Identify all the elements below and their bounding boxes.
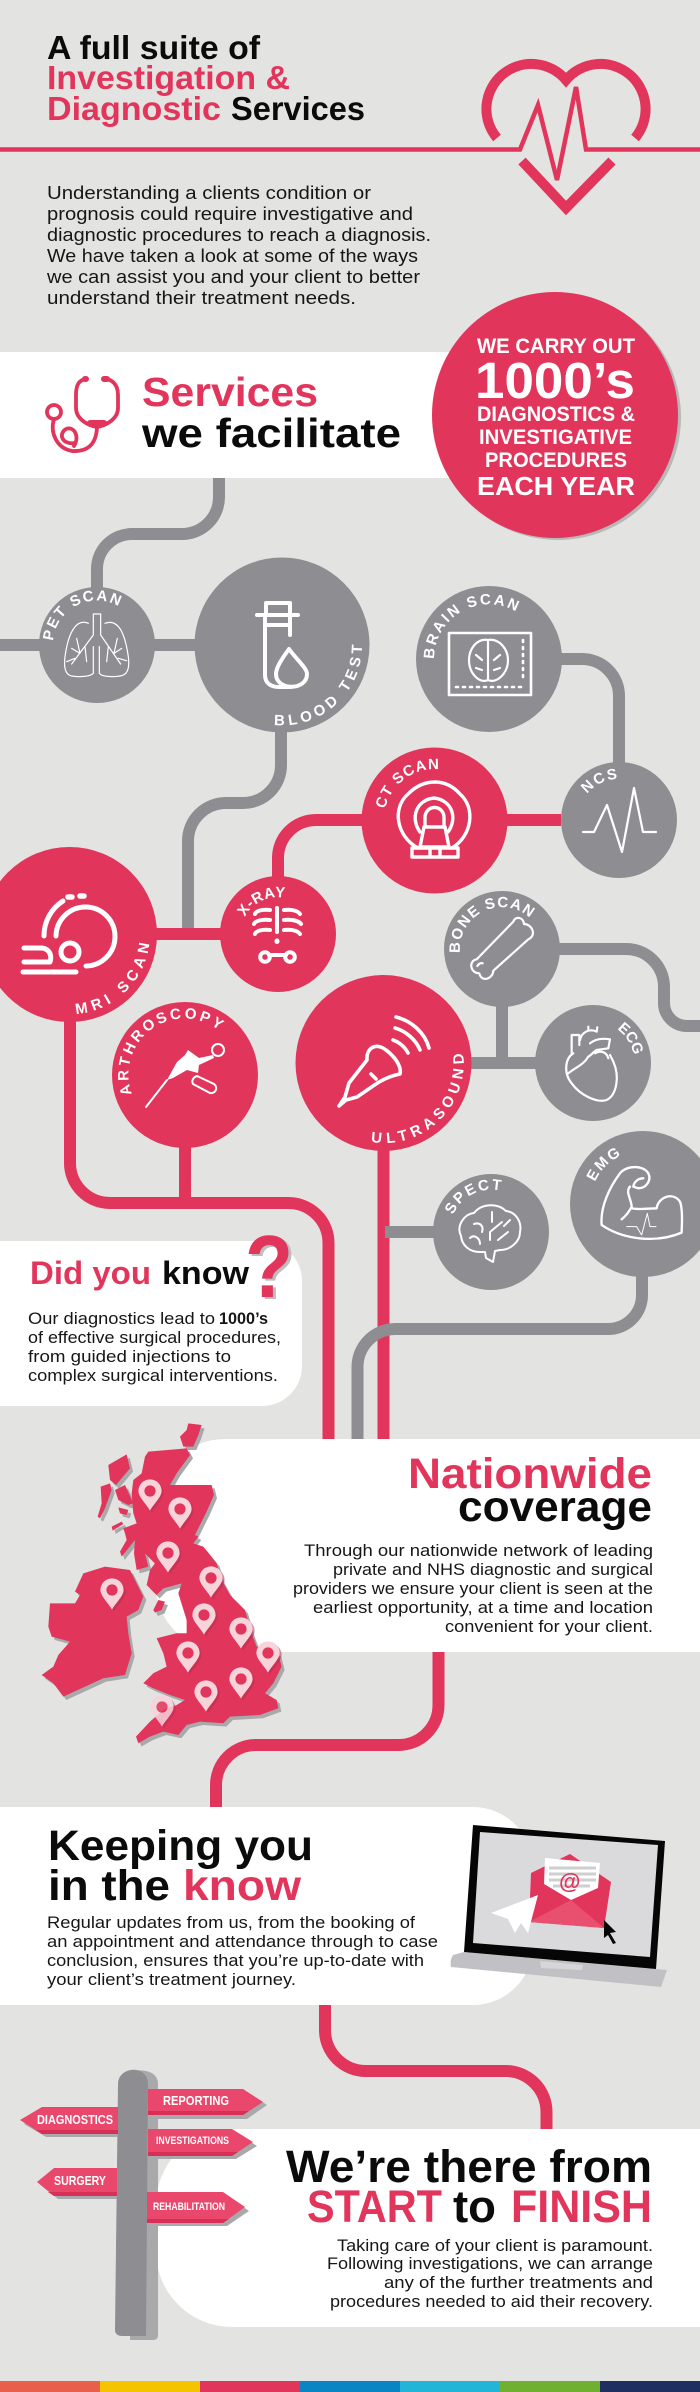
heading: services we facilitate (141, 369, 401, 456)
footer colour stripe (0, 2381, 700, 2392)
icon: ribcage (254, 908, 301, 962)
node: ECG: ECG (618, 1022, 643, 1054)
intro paragraph: We have taken a look at some of the ways (47, 246, 418, 266)
node: SPECT: SPECT (445, 1179, 502, 1214)
title: Investigation & (47, 59, 290, 96)
node: EMG: EMG (586, 1148, 620, 1181)
text: keeping you copy: Regular updates from us, from the booking of (47, 1913, 415, 1932)
connector line: keeping to finish (325, 2003, 547, 2130)
panel: services we facilitate band (0, 352, 470, 478)
node: ultrasound: ULTRASOUND (372, 1054, 464, 1143)
node: ultrasound (296, 975, 472, 1151)
node: arthroscopy (112, 1002, 258, 1148)
node: EMG (570, 1131, 700, 1277)
sign: investigations: INVESTIGATIONS (156, 2135, 229, 2147)
callout: 1000's each year: PROCEDURES (485, 449, 627, 472)
callout: 1000's each year: WE CARRY OUT (477, 335, 635, 358)
panel: did you know (0, 1217, 302, 1406)
node: X-ray (220, 876, 336, 992)
node: blood test: BLOOD TEST (274, 644, 362, 726)
text: nationwide copy: Through our nationwide network of leading (304, 1541, 653, 1560)
panel: nationwide coverage (155, 1439, 700, 1652)
sign: diagnostics (20, 2107, 118, 2137)
heading: keeping you in the know: in the (48, 1862, 170, 1910)
title: Diagnostic (47, 90, 221, 127)
sign: reporting: REPORTING (163, 2093, 229, 2108)
heading: did you know: know (162, 1255, 249, 1291)
callout: 1000's each year (432, 292, 681, 540)
intro paragraph: understand their treatment needs. (47, 288, 356, 308)
node: brain scan: BRAIN SCAN (424, 594, 520, 658)
node: CT scan (362, 748, 508, 894)
text: start to finish copy (327, 2236, 653, 2311)
icon: lungs (65, 614, 129, 677)
node: bone scan (444, 891, 560, 1007)
heading: we're there from start to finish: We’re there from (286, 2141, 652, 2192)
node: arthroscopy: ARTHROSCOPY (118, 1008, 224, 1094)
node: X-ray: X-RAY (236, 886, 286, 917)
panel: keeping you in the know (0, 1807, 533, 2005)
icon: flexed arm (601, 1167, 682, 1239)
node: PET scan (39, 587, 155, 703)
sign: reporting (148, 2089, 267, 2119)
text: start to finish copy: Taking care of your client is paramount. (337, 2236, 653, 2255)
node: PET scan: PET SCAN (42, 590, 122, 640)
title: Services (231, 90, 365, 127)
text: keeping you copy (47, 1913, 438, 1989)
node: MRI scan: MRI SCAN (75, 942, 150, 1014)
icon: CT scanner (398, 782, 470, 857)
heading: we're there from start to finish: to (453, 2181, 496, 2232)
heading: nationwide coverage: coverage (458, 1483, 652, 1531)
icon: test tube and drop (257, 603, 307, 687)
heading: did you know (30, 1255, 249, 1291)
callout: 1000's each year: EACH YEAR (477, 471, 635, 501)
icon: ultrasound probe (339, 1017, 429, 1106)
icon: stethoscope (47, 379, 118, 451)
heading: we're there from start to finish (286, 2141, 652, 2232)
icon: heart (566, 1027, 617, 1101)
text: keeping you copy: an appointment and attendance through to case (47, 1932, 438, 1951)
text: did you know copy: Our diagnostics lead to (28, 1309, 215, 1328)
icon: question mark: ? (248, 1219, 296, 1318)
text: did you know copy (28, 1309, 281, 1385)
icon: brain on screen (449, 633, 531, 695)
node: NCS (561, 762, 677, 878)
icon: bone (471, 918, 533, 979)
node: NCS: NCS (580, 768, 616, 793)
heading: we're there from start to finish: START (307, 2181, 442, 2232)
title: A full suite of (47, 29, 261, 66)
heading: keeping you in the know: Keeping you (48, 1822, 313, 1870)
text: start to finish copy: any of the further treatments and (384, 2273, 653, 2292)
text: keeping you copy: your client’s treatment journey. (47, 1970, 296, 1989)
text: nationwide copy: private and NHS diagnostic and surgical (333, 1560, 653, 1579)
signpost (20, 2070, 267, 2340)
text: start to finish copy: Following investigations, we can arrange (327, 2254, 653, 2273)
text: keeping you copy: conclusion, ensures that you’re up-to-date with (47, 1951, 424, 1970)
icon: laptop with email: @ (559, 1869, 580, 1894)
text: nationwide copy: providers we ensure your client is seen at the (293, 1579, 653, 1598)
callout: 1000's each year: DIAGNOSTICS & (477, 403, 635, 426)
title (47, 29, 365, 127)
sign: surgery (37, 2168, 117, 2199)
text: did you know copy: 1000’s (219, 1309, 268, 1328)
icon: brain (459, 1205, 520, 1262)
text: did you know copy: of effective surgical procedures, (28, 1328, 281, 1347)
icon: nerve signal (583, 788, 656, 852)
sign: surgery: SURGERY (54, 2173, 106, 2188)
map: UK and Ireland with location pins (42, 1423, 285, 1747)
intro paragraph: diagnostic procedures to reach a diagnosis. (47, 225, 431, 245)
icon: arthroscope (146, 1044, 224, 1107)
sign: rehabilitation: REHABILITATION (153, 2201, 225, 2213)
node: brain scan (416, 586, 562, 732)
intro paragraph: Understanding a clients condition or (47, 183, 371, 203)
text: start to finish copy: procedures needed to aid their recovery. (330, 2292, 653, 2311)
node: bone scan: BONE SCAN (449, 896, 535, 952)
node: SPECT (433, 1174, 549, 1290)
text: did you know copy: from guided injections to (28, 1347, 231, 1366)
sign: diagnostics: DIAGNOSTICS (37, 2112, 113, 2127)
heading: nationwide coverage (408, 1450, 652, 1531)
panel: start to finish (156, 2129, 700, 2327)
callout: 1000's each year: 1000’s (475, 352, 635, 409)
node: ECG (535, 1005, 651, 1121)
intro paragraph: prognosis could require investigative and (47, 204, 413, 224)
connector line: nationwide to keeping (216, 1650, 439, 1808)
heading: we're there from start to finish: FINISH (511, 2181, 652, 2232)
icon: laptop with email (451, 1825, 667, 1987)
heading: nationwide coverage: Nationwide (408, 1450, 652, 1498)
intro paragraph (46, 183, 431, 308)
node: blood test (194, 558, 370, 732)
sign: rehabilitation (147, 2192, 249, 2226)
heading: services we facilitate: Services (142, 369, 318, 415)
heading: keeping you in the know (48, 1822, 313, 1910)
heading: services we facilitate: we facilitate (141, 410, 401, 456)
heading: keeping you in the know: know (183, 1862, 302, 1910)
heading: did you know: Did you (30, 1255, 151, 1291)
sign: investigations (148, 2129, 257, 2159)
node: CT scan: CT SCAN (376, 758, 438, 808)
text: did you know copy: complex surgical interventions. (28, 1366, 278, 1385)
post (115, 2070, 158, 2340)
icon: question mark: ? (245, 1217, 293, 1316)
icon: MRI machine (23, 896, 115, 972)
callout: 1000's each year: INVESTIGATIVE (479, 426, 632, 449)
intro paragraph: we can assist you and your client to better (46, 267, 420, 287)
icon: heart with pulse line (0, 64, 700, 208)
node: MRI scan (0, 847, 157, 1022)
connector lines: services network (0, 478, 700, 1439)
text: nationwide copy: convenient for your client. (445, 1617, 653, 1636)
text: nationwide copy: earliest opportunity, at a time and location (313, 1598, 653, 1617)
text: nationwide copy (293, 1541, 653, 1636)
location pins (100, 1479, 282, 1728)
